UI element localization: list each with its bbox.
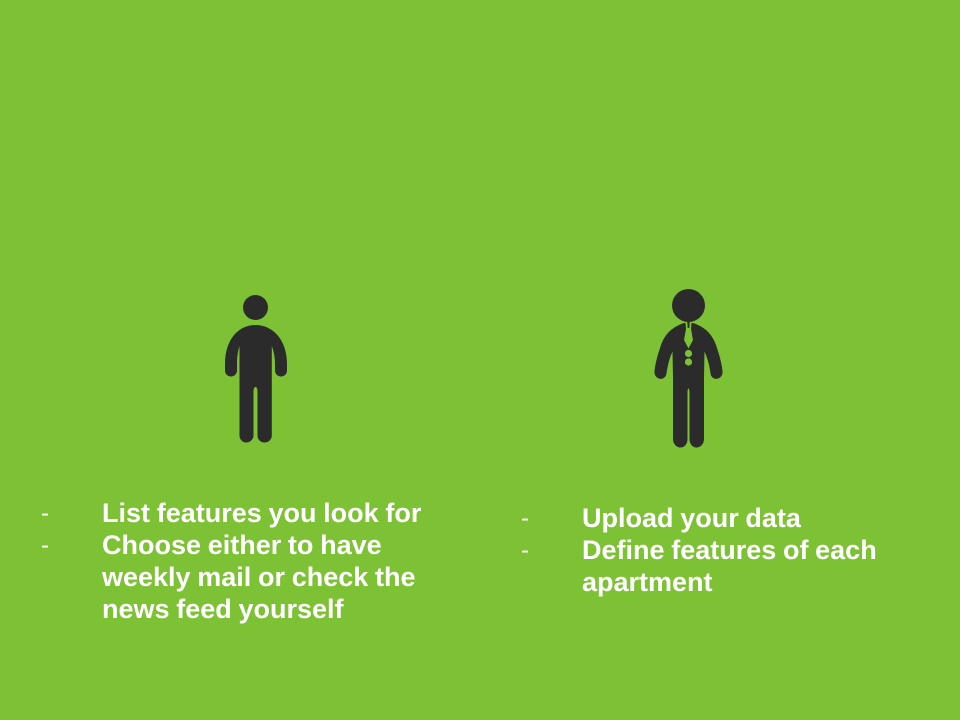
- text block: user steps: weekly mail or check the: [102, 562, 415, 592]
- text block: user steps: [41, 498, 421, 624]
- text block: landlord steps: -: [521, 536, 529, 564]
- text block: user steps: Choose either to have: [102, 530, 382, 560]
- text block: landlord steps: [521, 502, 877, 596]
- text block: landlord steps: Define features of each: [582, 534, 877, 564]
- icon detail: tie knot: [687, 322, 690, 328]
- icon: person in suit and tie: [654, 289, 723, 448]
- text block: landlord steps: apartment: [582, 566, 713, 596]
- text block: user steps: -: [41, 500, 49, 527]
- text block: user steps: news feed yourself: [102, 594, 343, 624]
- text block: user steps: -: [41, 532, 49, 559]
- text block: landlord steps: Upload your data: [582, 502, 801, 532]
- text block: user steps: List features you look for: [102, 498, 421, 528]
- text block: landlord steps: -: [521, 504, 529, 532]
- icon: casual person figure: [225, 295, 287, 442]
